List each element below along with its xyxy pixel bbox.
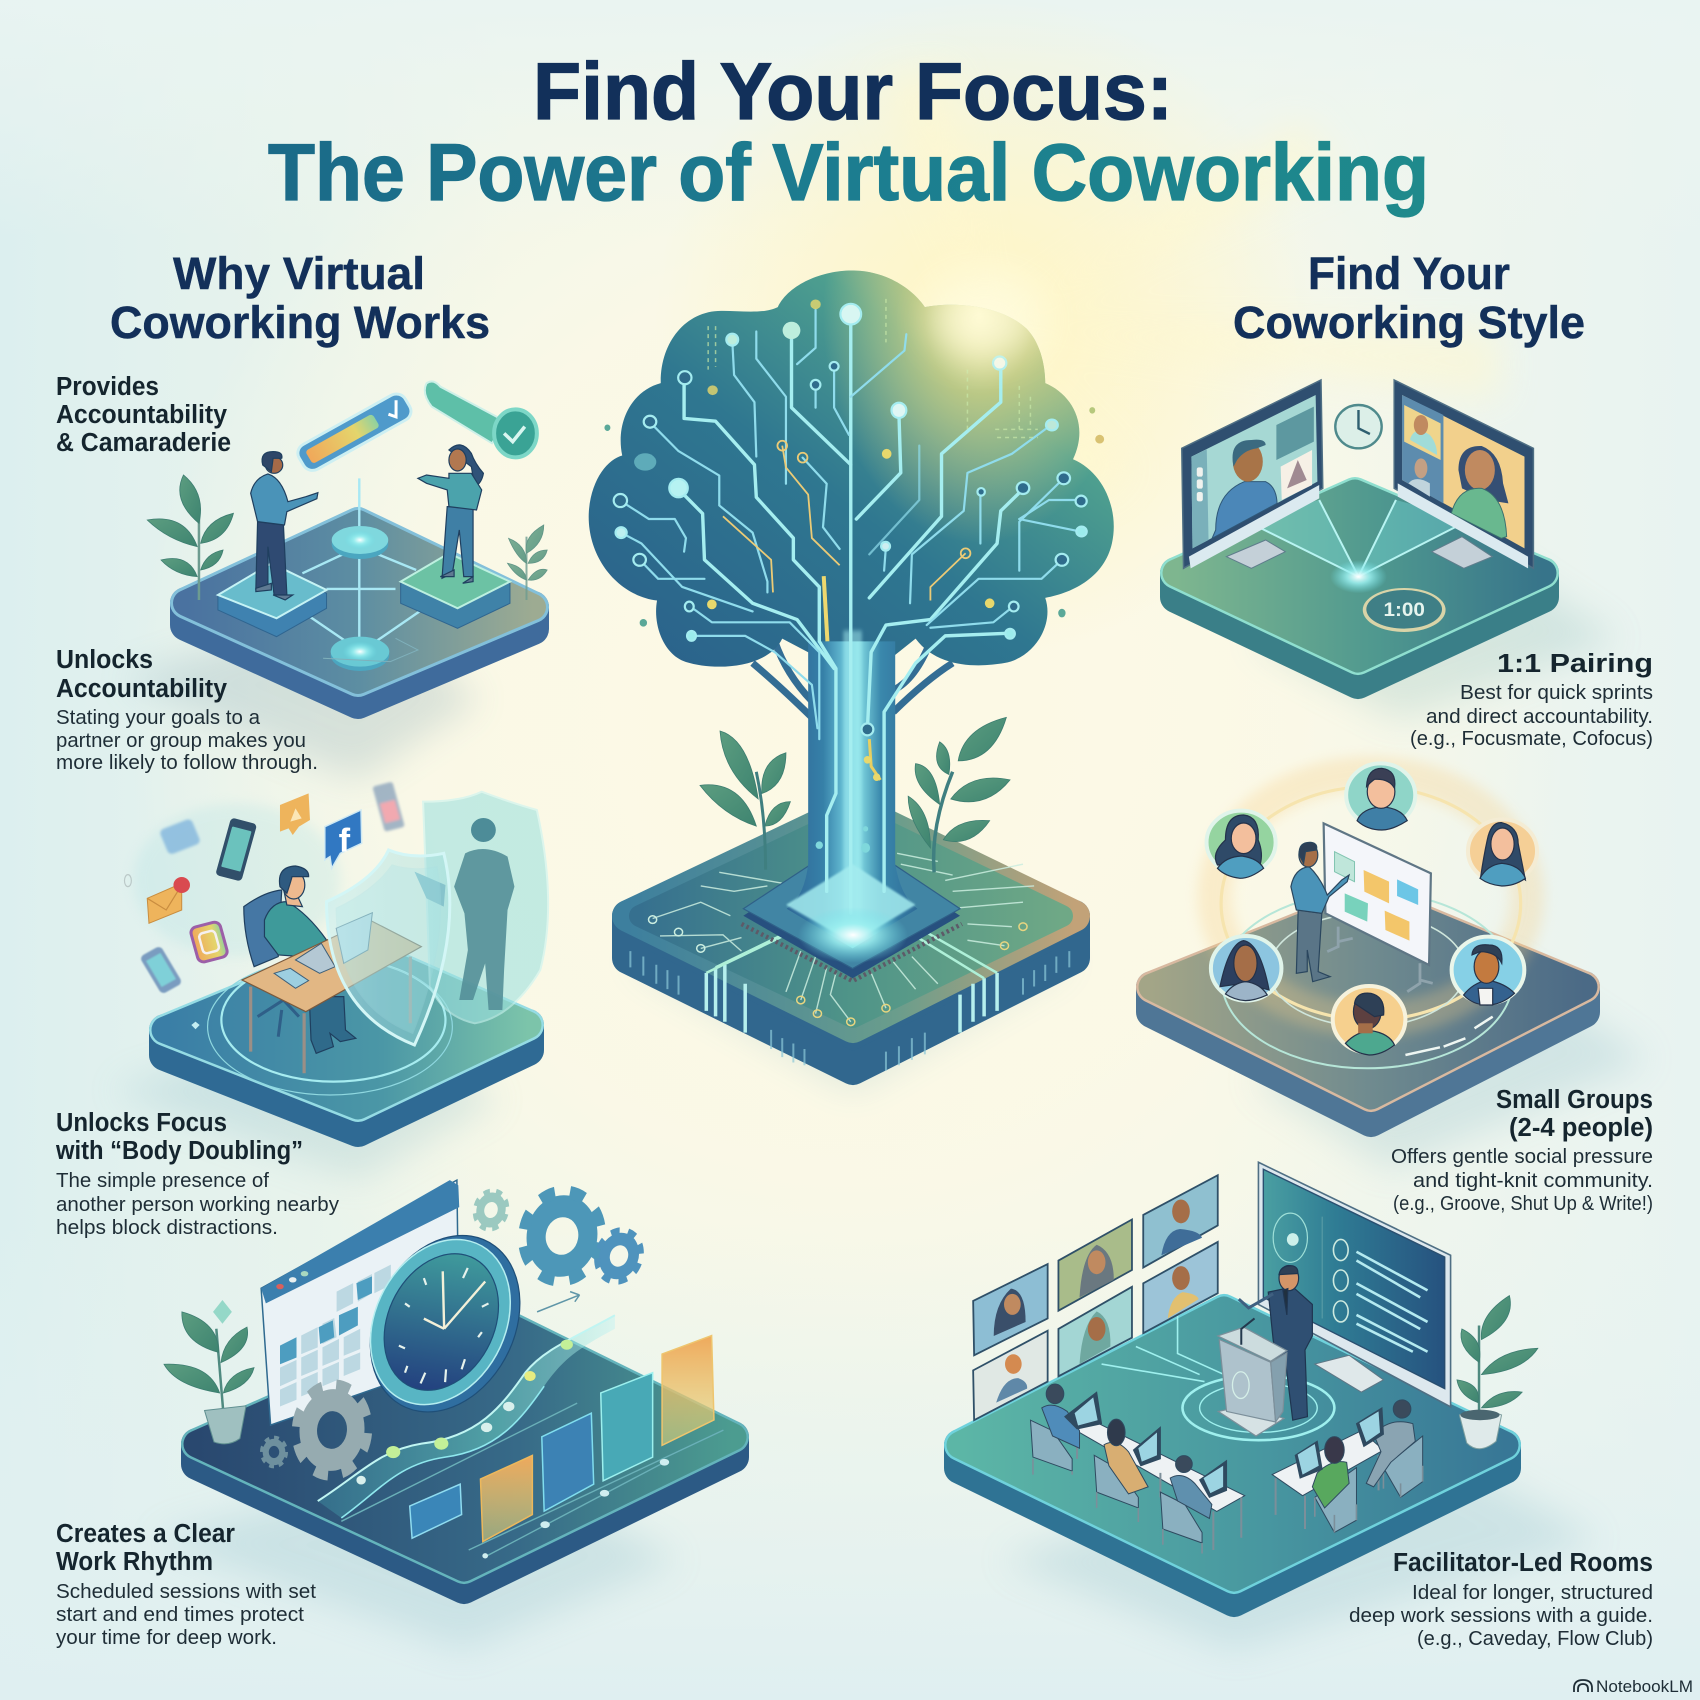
whiteboard xyxy=(1324,823,1433,992)
plant right of trunk xyxy=(908,717,1010,872)
timer badge: 1:00 xyxy=(1383,600,1425,621)
text: work rhythm: start and end times protect xyxy=(56,1603,304,1626)
text: unlocks accountability: more likely to follow through. xyxy=(56,751,318,774)
clock xyxy=(349,1225,541,1422)
text: body doubling: with “Body Doubling” xyxy=(55,1137,303,1165)
heading: why virtual coworking works xyxy=(110,248,490,348)
text: unlocks accountability xyxy=(56,646,318,774)
platform xyxy=(1176,493,1620,720)
wall clock xyxy=(1335,405,1382,448)
plant left of trunk xyxy=(700,731,790,870)
text: unlocks accountability: Unlocks xyxy=(56,646,153,674)
heading: find your coworking style: Coworking Style xyxy=(1233,297,1585,348)
text: 1:1 pairing xyxy=(1410,650,1653,750)
text: small groups: Offers gentle social pressure xyxy=(1391,1145,1653,1168)
attendees left table xyxy=(1030,1384,1245,1554)
light beams xyxy=(1244,500,1469,593)
warm halo and rings xyxy=(1215,773,1527,1068)
seated man xyxy=(264,866,356,1053)
panel: facilitator-led rooms xyxy=(960,1162,1600,1650)
text: work rhythm: Scheduled sessions with set xyxy=(56,1580,316,1603)
platform xyxy=(120,523,533,780)
text: work rhythm: Creates a Clear xyxy=(56,1520,235,1548)
glowing trunk base xyxy=(798,907,908,963)
heading: why virtual coworking works: Coworking Works xyxy=(110,297,490,348)
check badge card xyxy=(425,381,537,457)
central tree on circuit board xyxy=(589,271,1114,1090)
platform xyxy=(960,1310,1600,1650)
notification icons: f xyxy=(339,822,351,860)
text: unlocks accountability: Accountability xyxy=(56,675,228,703)
text: work rhythm xyxy=(56,1520,316,1649)
avatars xyxy=(1207,763,1537,1053)
text: 1:1 pairing: Best for quick sprints xyxy=(1460,681,1653,704)
right monitor xyxy=(1394,380,1533,568)
text: facilitator-led rooms: deep work sessions with a guide. xyxy=(1349,1604,1653,1627)
title: The Power of Virtual Coworking xyxy=(268,128,1429,218)
text: body doubling: helps block distractions. xyxy=(56,1216,278,1239)
timeline xyxy=(341,1292,723,1558)
chair xyxy=(244,890,299,1037)
text: facilitator-led rooms: Ideal for longer, structured xyxy=(1412,1581,1653,1604)
tile participants xyxy=(994,1199,1202,1403)
title xyxy=(268,47,1429,218)
text: unlocks accountability: Stating your goals to a xyxy=(56,706,261,729)
trunk and crown xyxy=(589,271,1114,948)
scene xyxy=(124,782,548,1095)
scene xyxy=(1182,380,1533,632)
text: work rhythm: Work Rhythm xyxy=(56,1548,213,1576)
text: 1:1 pairing: (e.g., Focusmate, Cofocus) xyxy=(1410,727,1653,750)
circuit traces in crown xyxy=(604,299,1104,913)
text: facilitator-led rooms: (e.g., Caveday, Flow Club) xyxy=(1417,1627,1653,1650)
title: Find Your Focus: xyxy=(533,47,1173,137)
presentation monitor xyxy=(1258,1162,1451,1407)
heading: find your coworking style xyxy=(1233,248,1585,348)
scene xyxy=(147,381,547,671)
panel: body doubling xyxy=(110,782,548,1180)
progress card xyxy=(294,390,415,474)
front shield xyxy=(327,850,450,1045)
text: body doubling: another person working nearby xyxy=(56,1193,340,1216)
scene xyxy=(164,1180,723,1558)
scene xyxy=(1207,763,1537,1068)
panel: 1:1 pairing xyxy=(1176,380,1620,720)
plant xyxy=(1457,1296,1538,1449)
sun glow on canopy xyxy=(930,282,1040,358)
monitor stands xyxy=(1226,537,1492,568)
notification icons xyxy=(124,782,405,995)
processor chip xyxy=(741,837,962,981)
network nodes and lines xyxy=(302,478,427,671)
plant left xyxy=(147,475,233,600)
pedestals xyxy=(218,553,510,637)
text: small groups: and tight-knit community. xyxy=(1413,1169,1653,1192)
text: provides accountability: Accountability xyxy=(56,401,228,429)
attendees right table xyxy=(1272,1400,1423,1532)
notebooklm watermark: NotebookLM xyxy=(1596,1678,1693,1696)
rhythm wave xyxy=(318,1315,615,1518)
platform xyxy=(150,1316,733,1650)
screen sheen xyxy=(1189,483,1528,568)
text: 1:1 pairing: and direct accountability. xyxy=(1426,705,1653,728)
desk xyxy=(242,913,421,1073)
text: small groups xyxy=(1391,1086,1653,1215)
calendar window xyxy=(261,1180,459,1425)
text: provides accountability xyxy=(56,373,231,457)
text: body doubling: Unlocks Focus xyxy=(56,1109,227,1137)
platform xyxy=(1152,899,1650,1170)
avatar portraits xyxy=(1215,768,1525,1055)
timeline cards xyxy=(410,1336,714,1542)
text: 1:1 pairing: 1:1 Pairing xyxy=(1497,650,1653,678)
text: provides accountability: & Camaraderie xyxy=(56,429,231,457)
timer badge xyxy=(1363,588,1446,632)
scene xyxy=(973,1162,1538,1554)
panel: small groups xyxy=(1152,763,1650,1170)
text: body doubling xyxy=(55,1109,340,1239)
text: facilitator-led rooms xyxy=(1349,1549,1653,1650)
panel: clear work rhythm xyxy=(150,1180,733,1650)
man xyxy=(251,452,318,600)
heading: why virtual coworking works: Why Virtual xyxy=(173,248,425,299)
text: body doubling: The simple presence of xyxy=(56,1169,269,1192)
woman xyxy=(418,445,483,583)
text: unlocks accountability: partner or group makes you xyxy=(56,729,306,752)
circuit board platform xyxy=(628,809,1074,1090)
platform xyxy=(110,950,528,1180)
heading: find your coworking style: Find Your xyxy=(1308,248,1510,299)
left monitor xyxy=(1182,380,1323,568)
floating gears xyxy=(471,1186,648,1287)
facilitator at podium xyxy=(1218,1265,1312,1436)
video tiles xyxy=(973,1175,1218,1420)
panel: provides accountability & camaraderie xyxy=(120,381,547,780)
back shield with silhouette xyxy=(414,792,548,1023)
text: work rhythm: your time for deep work. xyxy=(56,1626,277,1649)
text: small groups: (2-4 people) xyxy=(1509,1114,1653,1142)
text: provides accountability: Provides xyxy=(56,373,159,401)
text: small groups: Small Groups xyxy=(1496,1086,1653,1114)
floor glow lines xyxy=(1102,1315,1334,1440)
platform gears xyxy=(262,1383,371,1477)
text: facilitator-led rooms: Facilitator-Led Rooms xyxy=(1393,1549,1653,1577)
presenter xyxy=(1291,842,1349,982)
plant xyxy=(164,1300,254,1444)
plant right xyxy=(508,525,547,600)
text: small groups: (e.g., Groove, Shut Up & Write!) xyxy=(1393,1192,1653,1215)
distraction glow xyxy=(133,803,340,957)
